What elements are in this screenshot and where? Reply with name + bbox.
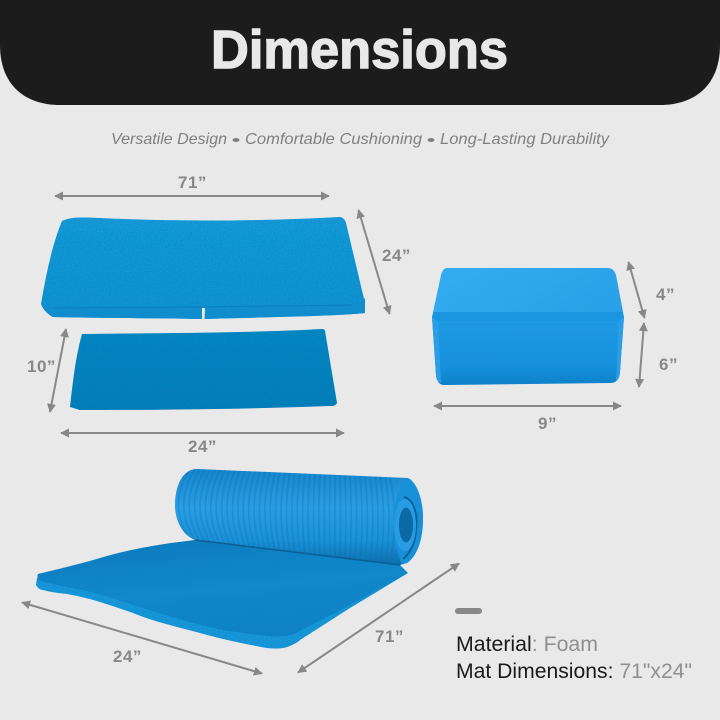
dimension: small towel 10 [27, 329, 66, 412]
dimension: block 6 [639, 323, 678, 387]
dimension: block 9: 9” [538, 414, 557, 433]
spec: material: Material: Foam [456, 633, 598, 656]
small towel [70, 329, 337, 410]
dimension: towel width 24: 24” [382, 246, 411, 265]
roll ribs [178, 469, 395, 550]
yoga block [432, 268, 624, 385]
dimension: mat length 71: 71” [375, 627, 404, 646]
dimension: block 4: 4” [656, 285, 675, 304]
dimension: towel length 71: 71” [178, 173, 207, 192]
dimension: mat length 71 [298, 564, 459, 672]
flat mat surface [37, 540, 408, 636]
dimension: small towel 10: 10” [27, 357, 56, 376]
roll body [175, 469, 423, 565]
subtitle: Long-Lasting Durability [440, 131, 610, 148]
subtitle: Versatile Design [111, 131, 227, 148]
subtitle: Comfortable Cushioning [245, 131, 422, 148]
dimension: small towel 24: 24” [188, 437, 217, 456]
rolled yoga mat [36, 468, 423, 649]
header banner [0, 0, 720, 105]
dimension: mat width 24 [22, 602, 262, 674]
dimension: block 6: 6” [659, 355, 678, 374]
flat mat edge [36, 570, 408, 649]
roll end [394, 478, 423, 564]
subtitle [111, 131, 610, 148]
dimension: block 4 [628, 262, 675, 318]
dimension: towel width 24 [358, 210, 411, 314]
accent bar [455, 608, 482, 614]
title: Dimensions [211, 20, 508, 80]
spec: mat dimensions: Mat Dimensions: 71"x24" [456, 660, 692, 683]
folded towel [41, 217, 365, 320]
dimension: mat width 24: 24” [113, 647, 142, 666]
